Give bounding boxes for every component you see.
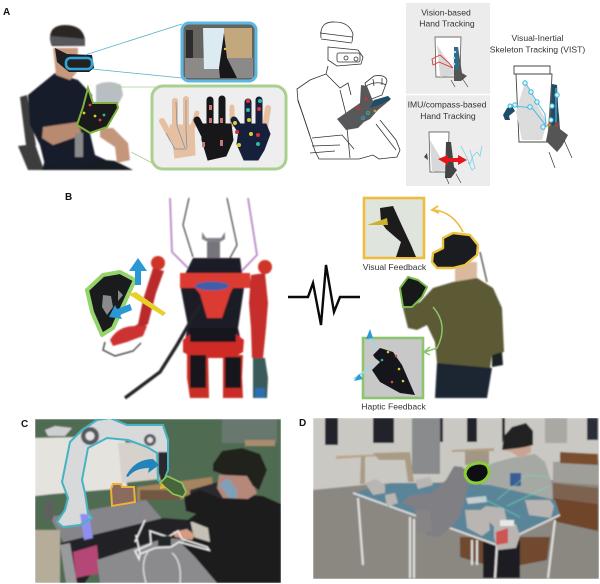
cuff: [492, 352, 503, 367]
heading: VIST: Visual-Inertial: [512, 33, 564, 43]
icon: signal waveform: [288, 265, 360, 325]
pants: [435, 363, 492, 398]
right back shelving: [222, 419, 277, 443]
robot right arm: [249, 273, 268, 358]
neck and face: [53, 48, 78, 80]
inset: cup view from headset: [182, 23, 256, 81]
icon: IMU cup: [424, 132, 482, 184]
panel A: photo of seated user with headset and glove: [18, 25, 133, 170]
particles: [480, 475, 549, 517]
panel B: red humanoid robot: [103, 198, 272, 398]
black glove back: [230, 107, 234, 125]
icon: robot hand with green outline: [87, 272, 166, 335]
shoulders and chest plate: [180, 273, 251, 318]
icon: vision-based cup: [432, 37, 468, 87]
panel: tracking comparison: Hand Tracking: [419, 18, 475, 28]
floor left: [35, 530, 60, 583]
icon: tracked headset: [55, 48, 94, 72]
bare hand with skeleton: [162, 99, 197, 158]
white board: [35, 436, 127, 496]
arm body: [57, 418, 168, 527]
robot left arm: [128, 268, 164, 334]
sweater: [403, 278, 504, 372]
arrow: glove to haptic feedback: [424, 307, 442, 355]
thick cable: [125, 305, 200, 398]
purple tubes: [170, 198, 257, 280]
heading: IMU tracking: IMU/compass-based: [408, 100, 487, 110]
label: B: B: [65, 192, 72, 203]
floor: [313, 480, 599, 579]
label: A: A: [3, 7, 10, 18]
black cables at top: [183, 198, 237, 258]
heading: vision-based tracking: Vision-based: [421, 8, 471, 18]
arrows: haptic directions: [354, 329, 376, 381]
label: D: D: [299, 418, 306, 429]
photo: operator in green sweater: [403, 252, 504, 398]
connector lines: [85, 24, 182, 166]
panel D: mixed reality table photo: [313, 418, 599, 579]
torso: [28, 73, 106, 167]
hands: [173, 529, 195, 540]
panel: tracking comparison: [406, 3, 490, 186]
table front: [60, 518, 192, 583]
head strap: [50, 36, 85, 46]
table: [50, 500, 163, 545]
electronics behind chest: [180, 258, 244, 346]
icon: green outlined glove: [400, 277, 427, 307]
legs: [187, 353, 209, 398]
arm shoulder piece: [45, 426, 72, 436]
panel C: robot arm teleoperation photo: [35, 418, 281, 583]
shelf: [137, 477, 213, 501]
legs: [42, 158, 133, 170]
panel: tracking comparison: Hand Tracking: [420, 111, 476, 121]
windows: [325, 418, 338, 445]
caption: haptic feedback: Haptic Feedback: [361, 402, 426, 412]
robot arm outline: [57, 418, 168, 527]
forearm: [42, 122, 82, 145]
person: [480, 454, 554, 500]
neck: [455, 262, 477, 282]
lower desk: [97, 538, 217, 583]
table legs: [358, 498, 555, 578]
chair: [18, 95, 44, 170]
operator torso: [182, 494, 281, 583]
pillar: [412, 418, 440, 474]
keys: [75, 133, 83, 157]
table frame: [353, 493, 560, 545]
arrow: headset to visual feedback: [432, 206, 463, 232]
arrows: blue haptic motion on robot hand: [109, 258, 147, 319]
black glove palm: [265, 108, 268, 128]
cup: [96, 82, 123, 103]
text: Skeleton Tracking (VIST): [490, 44, 585, 54]
person legs: [483, 540, 520, 578]
icon: illustrated grey glove: [337, 85, 391, 130]
drone: [135, 520, 209, 559]
glove highlight: [465, 463, 489, 483]
illustration: VIST cup and glove: [503, 66, 572, 168]
inset: glove variants: [152, 86, 286, 169]
icon: glove outlined in green: [77, 88, 118, 133]
cables: [480, 252, 487, 282]
arrow blue curve: [126, 459, 159, 477]
wood right: [560, 452, 598, 465]
pelvis: [183, 334, 244, 358]
tabletop: [353, 483, 560, 545]
wood under table: [460, 537, 550, 569]
dark machine: [189, 482, 223, 500]
operator arm: [183, 490, 220, 515]
caption: visual feedback: Visual Feedback: [363, 262, 427, 272]
inset marker yellow: [111, 484, 135, 506]
shoulder balls: [151, 256, 165, 270]
label: C: C: [21, 419, 28, 430]
head: [202, 232, 225, 258]
hair: [50, 25, 85, 46]
icon: yellow outlined headset: [432, 233, 478, 268]
lower right arm: [100, 128, 130, 163]
buildings: [401, 466, 469, 537]
inset: visual feedback: [364, 198, 424, 258]
glove in green: [160, 476, 186, 497]
illustration: line drawing of user: [297, 22, 400, 159]
head: [217, 475, 257, 499]
desks: [336, 454, 381, 459]
inset: haptic feedback: [363, 338, 423, 398]
floor right: [189, 520, 212, 543]
